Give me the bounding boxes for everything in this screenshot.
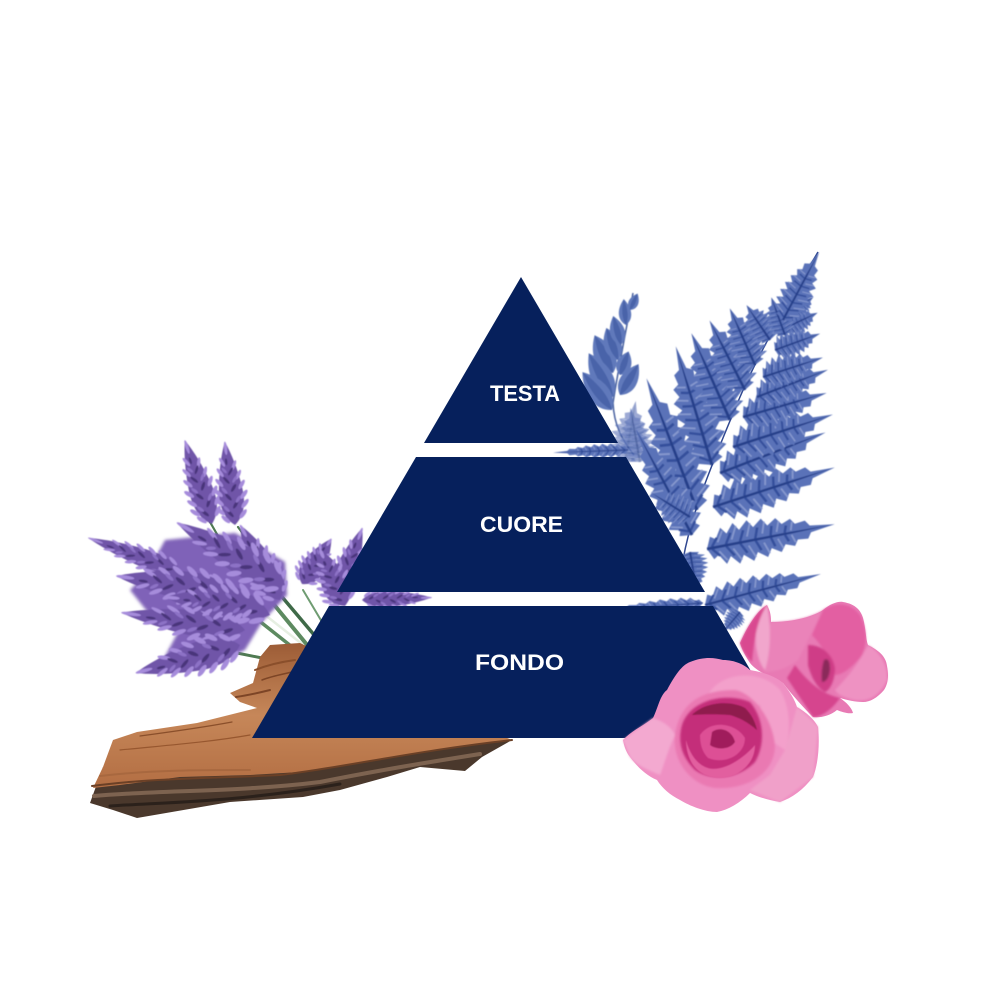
fern: left pinnae <box>625 244 834 518</box>
lower rose: outer petals <box>623 675 818 802</box>
lower rose: dark core <box>680 698 762 777</box>
pyramid tier: fondo <box>252 606 790 738</box>
pyramid tier: testa: TESTA <box>490 381 560 406</box>
illustration: bark <box>90 643 512 818</box>
fern: lower pinnae <box>608 419 748 638</box>
illustration: lower pink rose <box>623 658 819 812</box>
illustration: blue fern <box>553 244 841 638</box>
upper rose: petal shading <box>740 605 887 717</box>
bark: dark underside <box>90 740 512 818</box>
pyramid tier: testa <box>424 277 618 443</box>
illustration: lavender <box>83 435 432 694</box>
pyramid tier: fondo: FONDO <box>475 650 564 675</box>
lavender: stems <box>210 522 322 658</box>
pyramid <box>252 277 790 738</box>
lower rose: inner petals <box>686 703 757 778</box>
bark: top face <box>93 643 512 788</box>
bark: strata lines <box>92 660 512 806</box>
pyramid tier: cuore <box>337 457 705 592</box>
lavender: flower spikes <box>83 435 432 694</box>
upper rose: silhouette <box>740 602 888 717</box>
pyramid tier: cuore: CUORE <box>480 512 563 537</box>
fern: small back frond <box>553 292 658 465</box>
lower rose: silhouette <box>623 658 819 812</box>
lavender: dense flower mass <box>130 533 287 668</box>
fern: right pinnae <box>701 288 841 622</box>
fern: main frond rachis <box>683 252 818 560</box>
illustration: upper pink rose <box>740 602 888 717</box>
